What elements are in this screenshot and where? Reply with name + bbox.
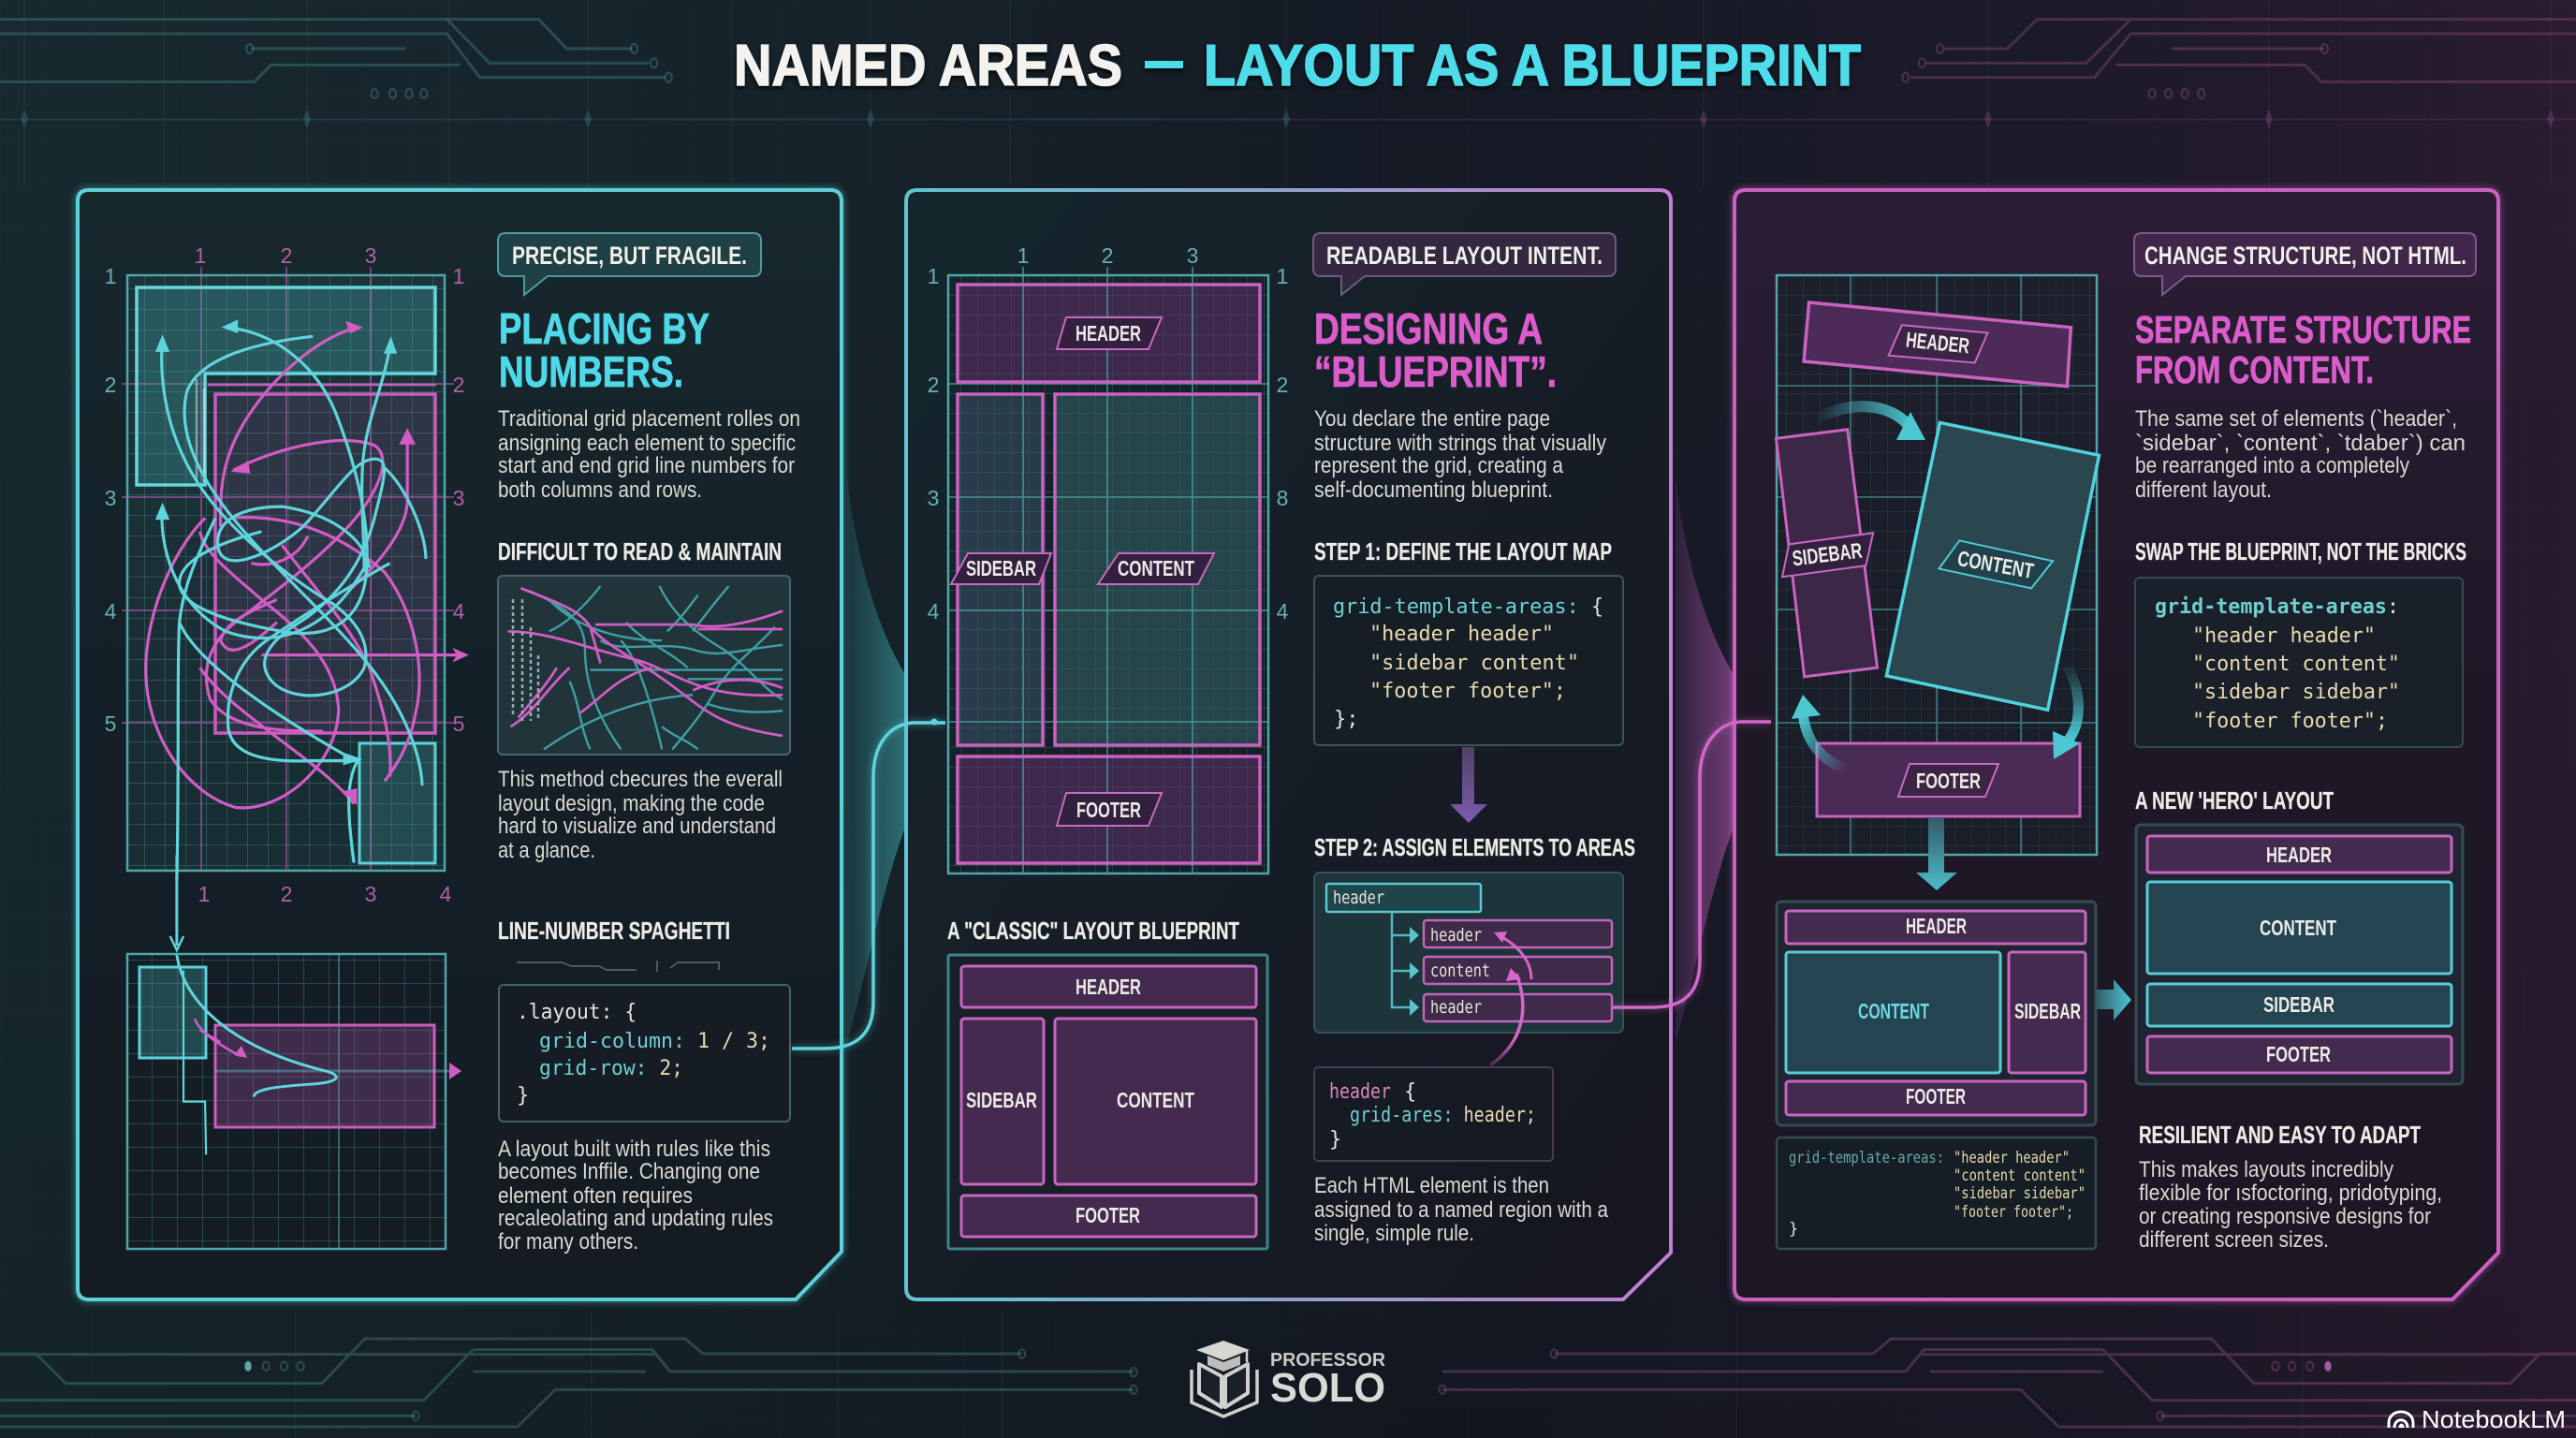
text block: assigned rule xyxy=(1314,1173,1609,1246)
text block: declare structure: structure with strings that visually xyxy=(1314,431,1606,456)
grid line numbers: 2 xyxy=(105,373,116,397)
grid line numbers: 8 xyxy=(1277,486,1288,510)
text block: fragile rules: recaleolating and updating rules xyxy=(498,1206,773,1231)
grid line numbers: 1 xyxy=(198,882,210,906)
subheading: classic layout: A "CLASSIC" LAYOUT BLUEPRINT xyxy=(947,917,1239,945)
text block: declare structure: represent the grid, creating a xyxy=(1314,453,1564,478)
code block: layout map: "footer footer"; xyxy=(1369,680,1566,703)
diagram: classic layout blueprint: FOOTER xyxy=(1076,1203,1140,1227)
code block: assign rule: } xyxy=(1329,1128,1341,1152)
grid line numbers: 4 xyxy=(440,882,452,906)
grid line numbers: 1 xyxy=(453,264,464,288)
grid line numbers: 5 xyxy=(453,712,464,736)
heading: designing a blueprint xyxy=(1314,304,1557,396)
moved area: content: CONTENT xyxy=(1955,546,2036,583)
text block: flexible layouts: or creating responsive designs for xyxy=(2139,1204,2431,1229)
heading: placing by numbers xyxy=(499,304,710,396)
area label: header: HEADER xyxy=(1076,321,1141,345)
swoosh: teal flow between panels 1 and 2 xyxy=(847,477,910,1044)
diagram: small placement grid xyxy=(127,855,461,1249)
grid line numbers: 1 xyxy=(1277,264,1288,288)
circuit traces: bottom left xyxy=(0,1339,1136,1427)
area label: content xyxy=(1098,553,1214,584)
panel frame xyxy=(906,190,1671,1299)
panel frame xyxy=(78,190,842,1299)
area label: footer xyxy=(1057,793,1162,826)
diagram: hero layout: HEADER xyxy=(2266,843,2332,867)
grid line numbers: 4 xyxy=(1277,599,1289,624)
text block: obscures layout: layout design, making the code xyxy=(498,791,765,816)
grid line numbers: 3 xyxy=(928,486,939,510)
icon: graduation cap and book xyxy=(1192,1341,1257,1416)
code block: new template: "content content" xyxy=(2192,653,2400,676)
code block: new template: "footer footer"; xyxy=(2192,710,2388,733)
panel: separate structure from content xyxy=(1734,190,2498,1299)
grid line numbers: 2 xyxy=(281,243,292,268)
subheading: line-number spaghetti: LINE-NUMBER SPAGHETTI xyxy=(498,917,730,945)
diagram: rearranged layout: FOOTER xyxy=(1906,1084,1966,1108)
title xyxy=(734,34,1861,98)
callout: change structure: CHANGE STRUCTURE, NOT HTML. xyxy=(2144,242,2466,270)
panel: placing by numbers xyxy=(78,190,842,1299)
code block: small grid template: } xyxy=(1789,1220,1798,1239)
grid line numbers xyxy=(105,243,465,906)
grid line numbers: 2 xyxy=(1277,373,1288,397)
image: tangled code thumbnail xyxy=(498,576,790,755)
diagram: rearranging elements xyxy=(1776,275,2099,855)
grid line numbers: 2 xyxy=(1102,243,1113,268)
grid line numbers xyxy=(928,243,1289,624)
grid line numbers: 3 xyxy=(453,486,464,510)
arrow: blueprint to layout xyxy=(1916,817,1957,890)
text block: declare structure: You declare the entire page xyxy=(1314,406,1550,432)
text block: assigned rule: single, simple rule. xyxy=(1314,1221,1474,1246)
logo: professor solo xyxy=(1192,1341,1386,1416)
subheading: step 2: STEP 2: ASSIGN ELEMENTS TO AREAS xyxy=(1314,833,1635,861)
grid line numbers: 1 xyxy=(105,264,116,288)
code block: new template: "sidebar sidebar" xyxy=(2192,681,2400,704)
text block: obscures layout: This method cbecures the everall xyxy=(498,767,783,792)
code block: line numbers xyxy=(499,985,790,1122)
diagram: element tree: content xyxy=(1430,961,1490,981)
diagram: rearranged layout: SIDEBAR xyxy=(2014,999,2081,1023)
text block: traditional placement: ansigning each element to specific xyxy=(498,431,796,456)
text block: fragile rules: element often requires xyxy=(498,1183,693,1209)
code block: assign rule xyxy=(1314,1067,1553,1161)
text block: obscures layout: at a glance. xyxy=(498,838,595,863)
moved area: footer xyxy=(1817,743,2080,816)
diagram: classic layout blueprint: SIDEBAR xyxy=(966,1088,1037,1112)
moved area: footer: FOOTER xyxy=(1916,769,1981,793)
connector: code to blueprint xyxy=(792,719,945,1049)
code block: layout map xyxy=(1314,576,1623,745)
grid line numbers: 1 xyxy=(928,264,939,288)
panel frame xyxy=(1734,190,2498,1299)
subheading: resilient: RESILIENT AND EASY TO ADAPT xyxy=(2139,1121,2421,1149)
grid line numbers: 4 xyxy=(105,599,117,624)
grid line numbers: 3 xyxy=(365,882,376,906)
diagram: hero layout: CONTENT xyxy=(2260,916,2336,940)
grid line numbers: 2 xyxy=(281,882,292,906)
code block: small grid template xyxy=(1777,1137,2096,1249)
subheading: step 1: STEP 1: DEFINE THE LAYOUT MAP xyxy=(1314,537,1612,565)
text block: fragile rules: A layout built with rules like this xyxy=(498,1137,770,1162)
connector: areas to hero structure xyxy=(1613,722,1771,1007)
circuit traces: bottom right xyxy=(1440,1339,2576,1427)
diagram: hero layout xyxy=(2136,825,2463,1084)
heading: placing by numbers: PLACING BY xyxy=(499,304,710,353)
grid line numbers: 3 xyxy=(365,243,376,268)
code block: assign rule: grid-ares: header; xyxy=(1350,1104,1536,1127)
arrow: step 1 to step 2 xyxy=(1450,747,1487,823)
diagram: classic layout blueprint: CONTENT xyxy=(1117,1088,1194,1112)
area label: header xyxy=(1057,317,1162,349)
moved area: sidebar: SIDEBAR xyxy=(1791,537,1864,570)
diagram: tangled grid placement xyxy=(105,243,469,906)
grid line numbers: 2 xyxy=(453,373,464,397)
code block: layout map: }; xyxy=(1334,708,1359,731)
subheading: new hero layout: A NEW 'HERO' LAYOUT xyxy=(2135,786,2334,814)
grid line numbers: 2 xyxy=(928,373,939,397)
area label: sidebar: SIDEBAR xyxy=(966,556,1036,580)
text block: fragile rules: for many others. xyxy=(498,1229,638,1255)
text block: declare structure xyxy=(1314,406,1606,503)
title: LAYOUT AS A BLUEPRINT xyxy=(1204,34,1861,98)
moved area: sidebar xyxy=(1776,430,1878,677)
diagram: rearranged layout xyxy=(1777,902,2096,1125)
text block: traditional placement: Traditional grid placement rolles on xyxy=(498,406,800,432)
text block: fragile rules xyxy=(498,1137,773,1255)
grid line numbers: 4 xyxy=(453,599,465,624)
spaghetti arrows xyxy=(146,319,469,880)
heading: placing by numbers: NUMBERS. xyxy=(499,347,683,396)
code block: new template xyxy=(2135,578,2463,747)
callout: change structure xyxy=(2134,233,2476,295)
logo: professor solo: SOLO xyxy=(1270,1365,1385,1411)
text block: flexible layouts: This makes layouts incredibly xyxy=(2139,1157,2393,1182)
text block: flexible layouts: flexible for ısfoctoring, pridotyping, xyxy=(2139,1181,2442,1206)
text block: same elements: `sidebar`, `content`, `tdaber`) can xyxy=(2135,431,2466,456)
text block: same elements: be rearranged into a completely xyxy=(2135,453,2409,478)
code block: layout map: grid-template-areas: { xyxy=(1333,595,1603,619)
code block: assign rule: header xyxy=(1329,1080,1391,1104)
code block: assign rule: { xyxy=(1404,1080,1416,1104)
grid line numbers: 4 xyxy=(928,599,940,624)
diagram: classic layout blueprint: HEADER xyxy=(1076,975,1141,999)
diagram: hero layout: SIDEBAR xyxy=(2263,992,2334,1017)
text block: traditional placement xyxy=(498,406,800,503)
text block: flexible layouts: different screen sizes. xyxy=(2139,1227,2329,1253)
text block: declare structure: self-documenting blueprint. xyxy=(1314,477,1553,503)
arrow: layout to hero xyxy=(2096,979,2131,1020)
text block: same elements: The same set of elements (`header`, xyxy=(2135,406,2457,432)
moved area: header xyxy=(1804,302,2071,387)
circuit traces: top left xyxy=(0,20,672,98)
heading: separate structure xyxy=(2135,308,2471,391)
text block: flexible layouts xyxy=(2139,1157,2442,1253)
area label: content: CONTENT xyxy=(1118,556,1194,580)
diagram: element tree: header xyxy=(1333,888,1384,908)
logo: professor solo: PROFESSOR xyxy=(1270,1350,1386,1371)
grid line numbers: 5 xyxy=(105,712,116,736)
area label: footer: FOOTER xyxy=(1076,798,1141,822)
code block: new template: "header header" xyxy=(2192,624,2376,648)
heading: separate structure: SEPARATE STRUCTURE xyxy=(2135,308,2471,351)
text block: same elements: different layout. xyxy=(2135,477,2272,503)
diagram: element tree: header xyxy=(1430,997,1482,1018)
diagram: classic layout on grid xyxy=(928,243,1289,873)
grid line numbers: 3 xyxy=(1187,243,1198,268)
code block: layout map: "header header" xyxy=(1369,623,1554,646)
title: NAMED AREAS xyxy=(734,34,1122,98)
heading: designing a blueprint: “BLUEPRINT”. xyxy=(1314,347,1557,396)
text block: traditional placement: both columns and rows. xyxy=(498,477,702,503)
arrows: rule to element xyxy=(1490,932,1531,1065)
diagram: rearranged layout: HEADER xyxy=(1906,914,1967,938)
text block: assigned rule: Each HTML element is then xyxy=(1314,1173,1549,1198)
code block: small grid template: "sidebar sidebar" xyxy=(1954,1184,2086,1203)
callout: precise, but fragile: PRECISE, BUT FRAGILE. xyxy=(512,242,747,270)
subheading: difficult to read: DIFFICULT TO READ & MAINTAIN xyxy=(498,537,782,565)
text block: same elements xyxy=(2135,406,2466,503)
callout: readable layout intent: READABLE LAYOUT INTENT. xyxy=(1326,242,1603,270)
callout: precise, but fragile xyxy=(498,233,761,295)
grid line numbers: 3 xyxy=(105,486,116,510)
code block: layout map: "sidebar content" xyxy=(1369,652,1579,675)
code block: line numbers: grid-row: 2; xyxy=(539,1057,683,1080)
moved area: header: HEADER xyxy=(1905,328,1971,359)
heading: separate structure: FROM CONTENT. xyxy=(2135,348,2374,391)
code block: new template: grid-template-areas: xyxy=(2155,595,2399,619)
code block: small grid template: "content content" xyxy=(1954,1167,2086,1185)
panel: designing a blueprint xyxy=(906,190,1671,1299)
arrows: movement xyxy=(1792,406,2080,770)
diagram: classic layout blueprint xyxy=(948,955,1267,1249)
text block: assigned rule: assigned to a named region with a xyxy=(1314,1197,1609,1223)
moved area: content xyxy=(1886,422,2099,710)
callout: readable layout intent xyxy=(1313,233,1616,295)
area label: sidebar xyxy=(951,553,1051,584)
text block: obscures layout: hard to visualize and understand xyxy=(498,814,776,839)
code block: small grid template: "header header" xyxy=(1954,1149,2070,1167)
grid line numbers: 1 xyxy=(1017,243,1029,268)
text block: fragile rules: becomes Inffile. Changing one xyxy=(498,1159,760,1184)
diagram: element tree: header xyxy=(1430,925,1482,946)
grid line numbers: 1 xyxy=(195,243,206,268)
code block: line numbers: } xyxy=(517,1084,529,1108)
code block: line numbers: grid-column: 1 / 3; xyxy=(539,1030,770,1053)
heading: designing a blueprint: DESIGNING A xyxy=(1314,304,1543,353)
diagram: element tree xyxy=(1314,873,1623,1033)
diagram: rearranged layout: CONTENT xyxy=(1858,999,1929,1023)
code block: line numbers: .layout: { xyxy=(517,1001,637,1024)
text block: obscures layout xyxy=(498,767,783,863)
diagram: hero layout: FOOTER xyxy=(2266,1042,2331,1066)
text block: traditional placement: start and end grid line numbers for xyxy=(498,453,795,478)
watermark: notebooklm: NotebookLM xyxy=(2422,1405,2566,1433)
code block: small grid template: "footer footer"; xyxy=(1954,1203,2073,1222)
circuit traces: top right xyxy=(1902,20,2576,98)
code block: small grid template: grid-template-areas: xyxy=(1789,1149,1944,1167)
swoosh: magenta flow between panels 2 and 3 xyxy=(1676,477,1738,1044)
